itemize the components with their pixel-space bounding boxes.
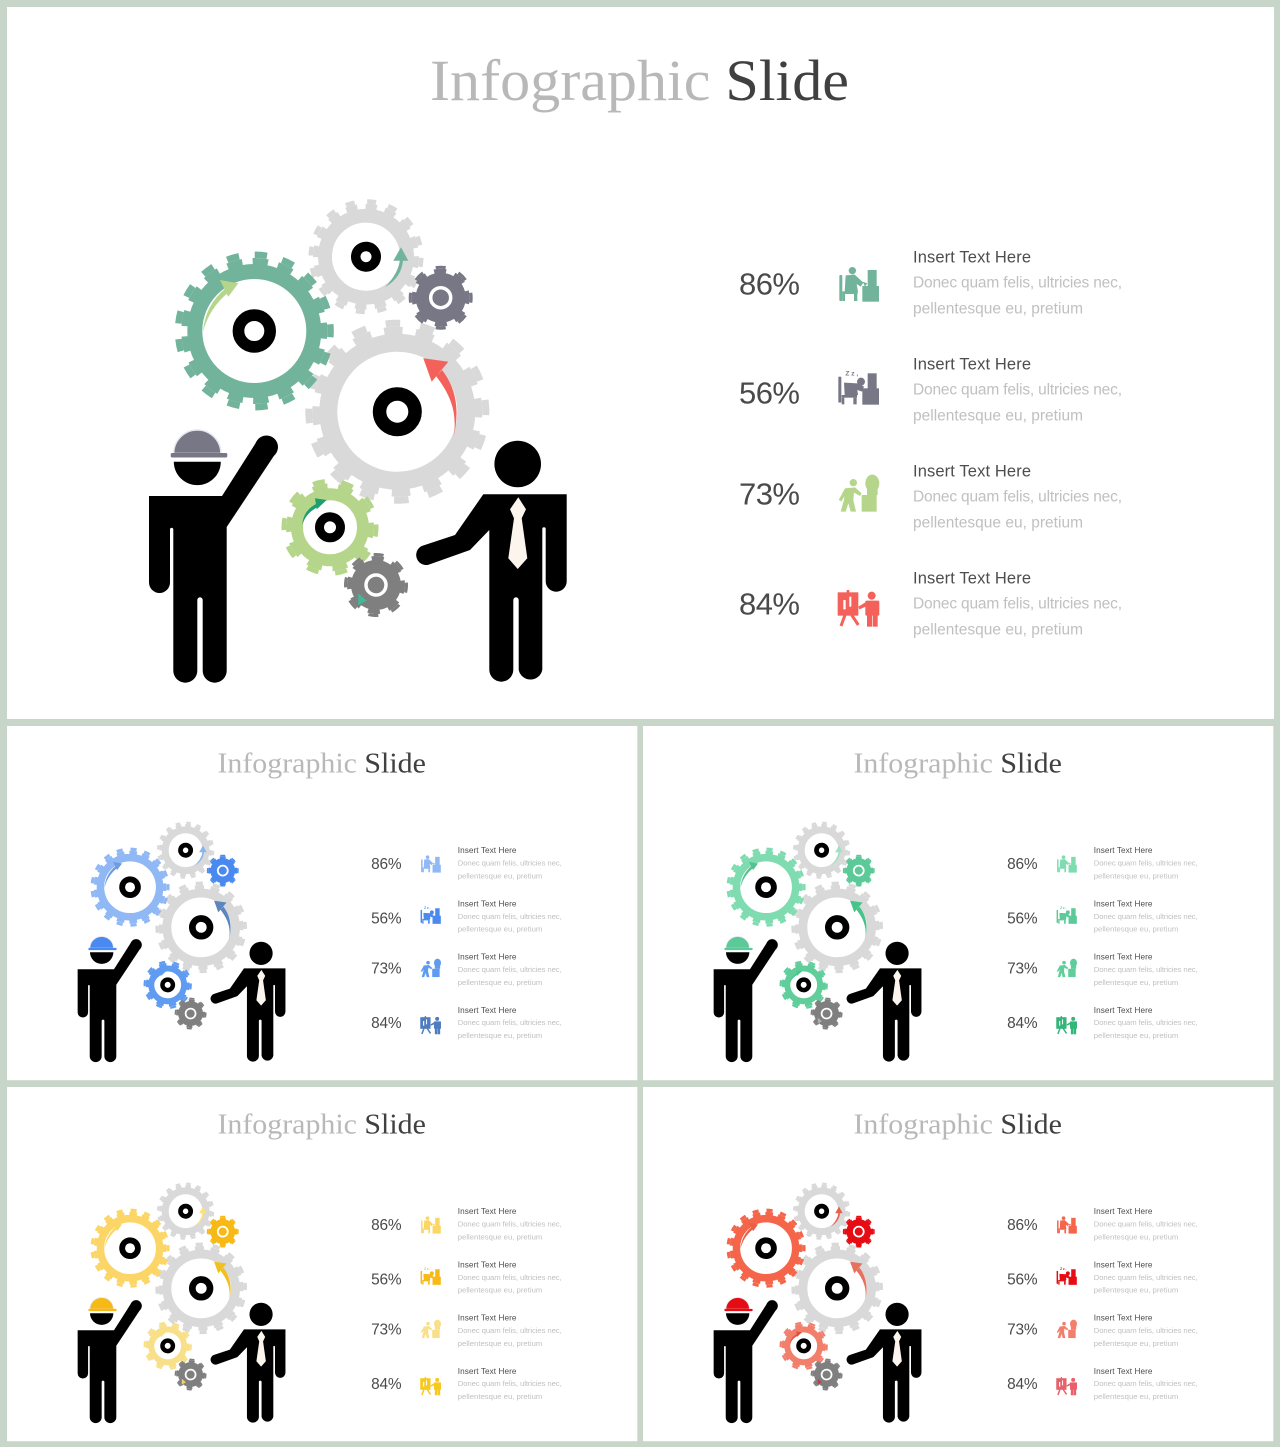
stats: Insert Text Here [1094, 899, 1153, 908]
stats: pellentesque eu, pretium [1094, 1392, 1178, 1401]
gear: top grey [305, 196, 427, 317]
stat row 1: Donec quam felis, ultricies nec, [913, 274, 1122, 292]
icon: presenter at board [838, 590, 879, 627]
stats: Insert Text Here [1094, 1314, 1153, 1323]
icon: sleeping person at desk [838, 370, 879, 405]
stats: 86% [371, 856, 402, 873]
stats: Insert Text Here [1094, 953, 1153, 962]
gear: small grey [343, 552, 409, 618]
stats: pellentesque eu, pretium [1094, 871, 1178, 880]
stats [1007, 1207, 1198, 1401]
illustration [78, 820, 285, 1062]
stats: 84% [1007, 1376, 1038, 1393]
businessman head [494, 441, 541, 487]
stats: Insert Text Here [458, 1207, 517, 1216]
stat row 3: Donec quam felis, ultricies nec, [913, 488, 1122, 506]
icons column [838, 267, 879, 627]
stats: pellentesque eu, pretium [458, 925, 542, 934]
stats: 84% [371, 1376, 402, 1393]
stats: Insert Text Here [458, 846, 517, 855]
panel background [643, 1087, 1273, 1441]
icon: person and statue [839, 475, 879, 512]
arrow on top grey gear [385, 247, 408, 287]
stats: pellentesque eu, pretium [458, 978, 542, 987]
icons [420, 855, 441, 1034]
icons [420, 1216, 441, 1395]
stats [371, 846, 562, 1040]
stats: Donec quam felis, ultricies nec, [458, 859, 562, 868]
stat row 3: 73% [739, 476, 800, 512]
title: Infographic Slide [217, 747, 426, 779]
stats: Donec quam felis, ultricies nec, [458, 1379, 562, 1388]
arrow on large coloured gear [203, 280, 238, 332]
stats: Donec quam felis, ultricies nec, [1094, 859, 1198, 868]
illustration [714, 1181, 921, 1423]
stats: 86% [371, 1217, 402, 1234]
stat row 2: Insert Text Here [913, 356, 1031, 374]
stats: pellentesque eu, pretium [458, 871, 542, 880]
stats: Donec quam felis, ultricies nec, [1094, 1018, 1198, 1027]
stats: Insert Text Here [458, 1260, 517, 1269]
stat row 3: pellentesque eu, pretium [913, 514, 1083, 532]
title: Infographic Slide [853, 747, 1062, 779]
necktie [508, 497, 527, 569]
stats: Insert Text Here [458, 899, 517, 908]
stat row 1: Insert Text Here [913, 248, 1031, 266]
icons [1056, 1216, 1077, 1395]
panel: red variant [643, 1087, 1273, 1441]
panel: yellow variant [7, 1087, 637, 1441]
stats: Insert Text Here [458, 1367, 517, 1376]
stats: Insert Text Here [1094, 1207, 1153, 1216]
stats: Insert Text Here [1094, 1367, 1153, 1376]
stats: Donec quam felis, ultricies nec, [1094, 965, 1198, 974]
stats: Insert Text Here [1094, 1006, 1153, 1015]
stats: Donec quam felis, ultricies nec, [458, 1326, 562, 1335]
illustration [78, 1181, 285, 1423]
stats: Donec quam felis, ultricies nec, [458, 912, 562, 921]
stats: 73% [1007, 961, 1038, 978]
stats: Donec quam felis, ultricies nec, [458, 1018, 562, 1027]
stats: 86% [1007, 856, 1038, 873]
stats: Insert Text Here [1094, 846, 1153, 855]
stat row 1: 86% [739, 266, 800, 302]
title: Infographic Slide [853, 1108, 1062, 1140]
stats: 86% [1007, 1217, 1038, 1234]
stats: pellentesque eu, pretium [1094, 1286, 1178, 1295]
worker body [149, 496, 227, 683]
arrow on large grey gear [423, 358, 457, 437]
icon: person at desk [839, 267, 879, 302]
stats: pellentesque eu, pretium [1094, 1232, 1178, 1241]
stats [1007, 846, 1198, 1040]
stat row 3: Insert Text Here [913, 462, 1031, 480]
stats: pellentesque eu, pretium [458, 1286, 542, 1295]
stats: 73% [371, 1322, 402, 1339]
stat row 1 [739, 248, 1122, 318]
title: Infographic Slide [430, 48, 849, 113]
worker raised arm [215, 436, 278, 527]
figure: worker with helmet [149, 430, 278, 683]
worker head [174, 462, 221, 485]
stat row 2: Donec quam felis, ultricies nec, [913, 382, 1122, 398]
stats: 84% [371, 1015, 402, 1032]
stats: pellentesque eu, pretium [458, 1031, 542, 1040]
stat row 2: 56% [739, 376, 800, 410]
figure: businessman [416, 441, 567, 682]
stats: Donec quam felis, ultricies nec, [458, 1220, 562, 1229]
stats: pellentesque eu, pretium [1094, 1339, 1178, 1348]
panel: main slide [7, 7, 1274, 719]
stats: Insert Text Here [1094, 1260, 1153, 1269]
gear: large grey [305, 319, 490, 504]
stats: Donec quam felis, ultricies nec, [1094, 1273, 1198, 1282]
stats: 73% [371, 961, 402, 978]
stat row 2 [739, 356, 1122, 424]
gear: lower coloured [281, 478, 379, 577]
stats: 56% [371, 910, 402, 927]
stat row 4: Donec quam felis, ultricies nec, [913, 596, 1122, 612]
gear: large coloured [178, 255, 331, 407]
stats: 56% [371, 1271, 402, 1288]
stat row 4: 84% [739, 586, 800, 622]
illustration [714, 820, 921, 1062]
stat row 2: pellentesque eu, pretium [913, 408, 1083, 424]
stats: Donec quam felis, ultricies nec, [1094, 912, 1198, 921]
stats: pellentesque eu, pretium [458, 1392, 542, 1401]
arrow on lower coloured gear [302, 498, 327, 525]
title: Infographic Slide [217, 1108, 426, 1140]
icons [1056, 855, 1077, 1034]
illustration: gears and figures [149, 196, 567, 683]
panel background [643, 726, 1273, 1080]
stats: pellentesque eu, pretium [1094, 978, 1178, 987]
stats: Insert Text Here [458, 1314, 517, 1323]
stats: 84% [1007, 1015, 1038, 1032]
stats: 73% [1007, 1322, 1038, 1339]
stats: Donec quam felis, ultricies nec, [1094, 1326, 1198, 1335]
stats: 56% [1007, 910, 1038, 927]
stat row 3 [739, 462, 1122, 532]
stats [371, 1207, 562, 1401]
panel: green variant [643, 726, 1273, 1080]
stats: pellentesque eu, pretium [458, 1339, 542, 1348]
gear: small dark coloured [410, 267, 471, 328]
stats: Donec quam felis, ultricies nec, [1094, 1379, 1198, 1388]
stats: pellentesque eu, pretium [1094, 925, 1178, 934]
stats: Donec quam felis, ultricies nec, [458, 1273, 562, 1282]
panel background [7, 726, 637, 1080]
stats: Insert Text Here [458, 953, 517, 962]
businessman body [416, 494, 567, 682]
stats: pellentesque eu, pretium [458, 1232, 542, 1241]
panel background [7, 1087, 637, 1441]
stats: Insert Text Here [458, 1006, 517, 1015]
stat row 1: pellentesque eu, pretium [913, 300, 1083, 318]
icon: sleeping person at desk: Z z , [845, 370, 858, 377]
stats: pellentesque eu, pretium [1094, 1031, 1178, 1040]
stats: 56% [1007, 1271, 1038, 1288]
panel: blue variant [7, 726, 637, 1080]
stats: Donec quam felis, ultricies nec, [458, 965, 562, 974]
panel background [7, 7, 1274, 719]
arrow on small grey gear [358, 593, 367, 605]
stats: Donec quam felis, ultricies nec, [1094, 1220, 1198, 1229]
helmet [171, 430, 227, 458]
stat row 4 [739, 570, 1122, 638]
stat row 4: Insert Text Here [913, 570, 1031, 588]
stat row 4: pellentesque eu, pretium [913, 622, 1083, 638]
